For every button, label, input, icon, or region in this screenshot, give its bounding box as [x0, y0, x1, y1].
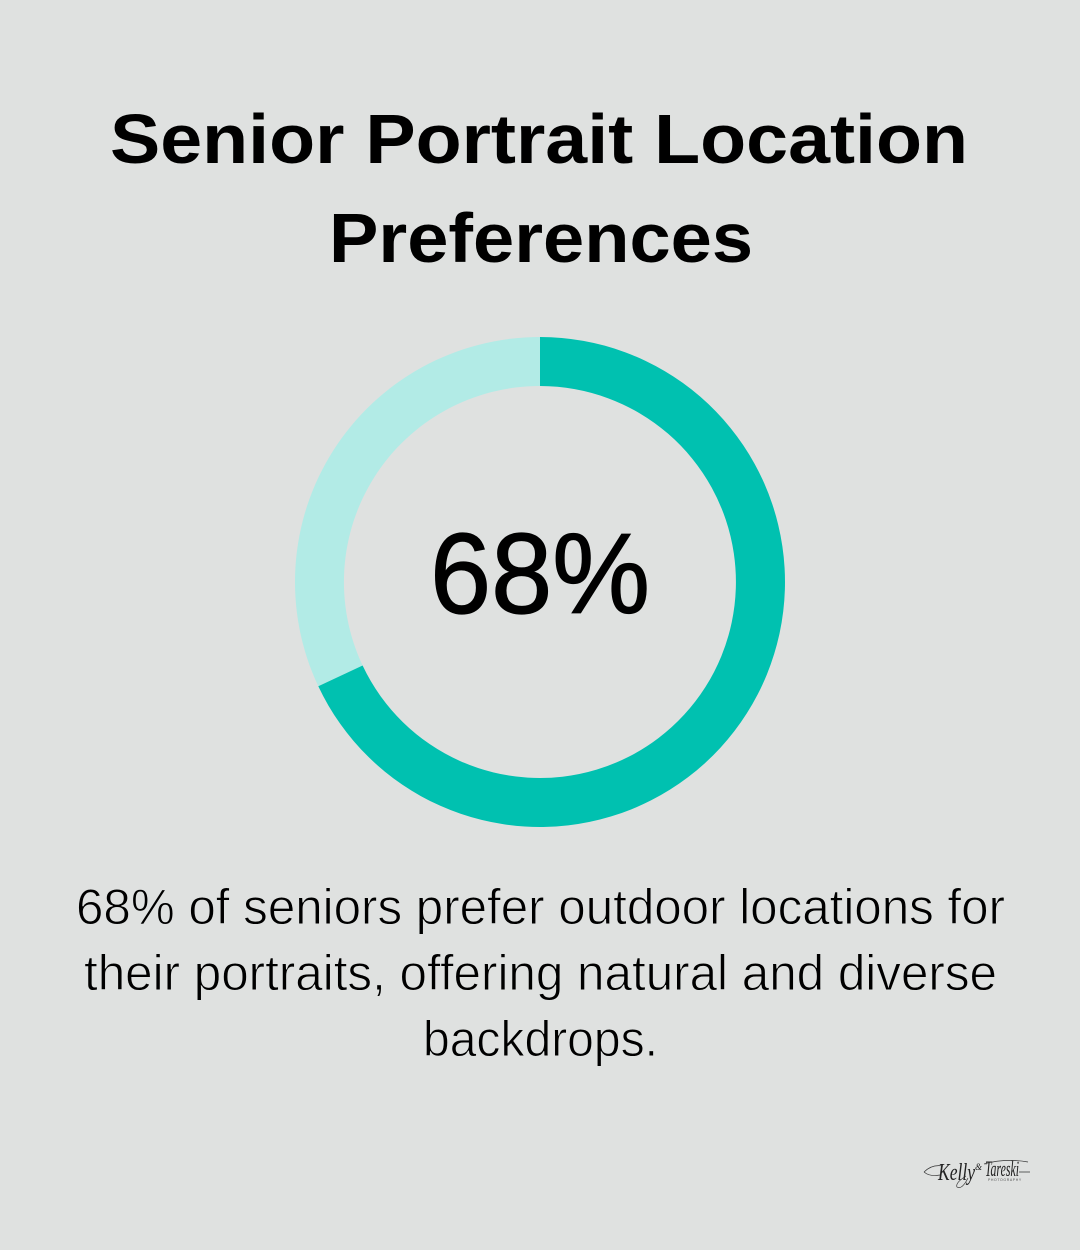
- center percentage: 68%: [430, 511, 650, 638]
- description text: 68% of seniors prefer outdoor locations for: [76, 879, 1005, 935]
- donut chart: 68%: [295, 337, 785, 827]
- signature logo: Kelly: [937, 1160, 975, 1186]
- title: [110, 100, 968, 277]
- title: Senior Portrait Location: [110, 100, 968, 178]
- signature logo: &: [975, 1162, 982, 1172]
- title: Preferences: [329, 199, 753, 277]
- description text: their portraits, offering natural and diverse: [84, 945, 997, 1001]
- signature logo: Tareski: [985, 1156, 1019, 1181]
- signature logo: [924, 1156, 1030, 1188]
- description text: backdrops.: [423, 1011, 658, 1067]
- remaining 32% segment: [295, 337, 540, 686]
- signature logo: PHOTOGRAPHY: [988, 1178, 1022, 1182]
- description text: [76, 879, 1005, 1067]
- 68% segment: [318, 337, 785, 827]
